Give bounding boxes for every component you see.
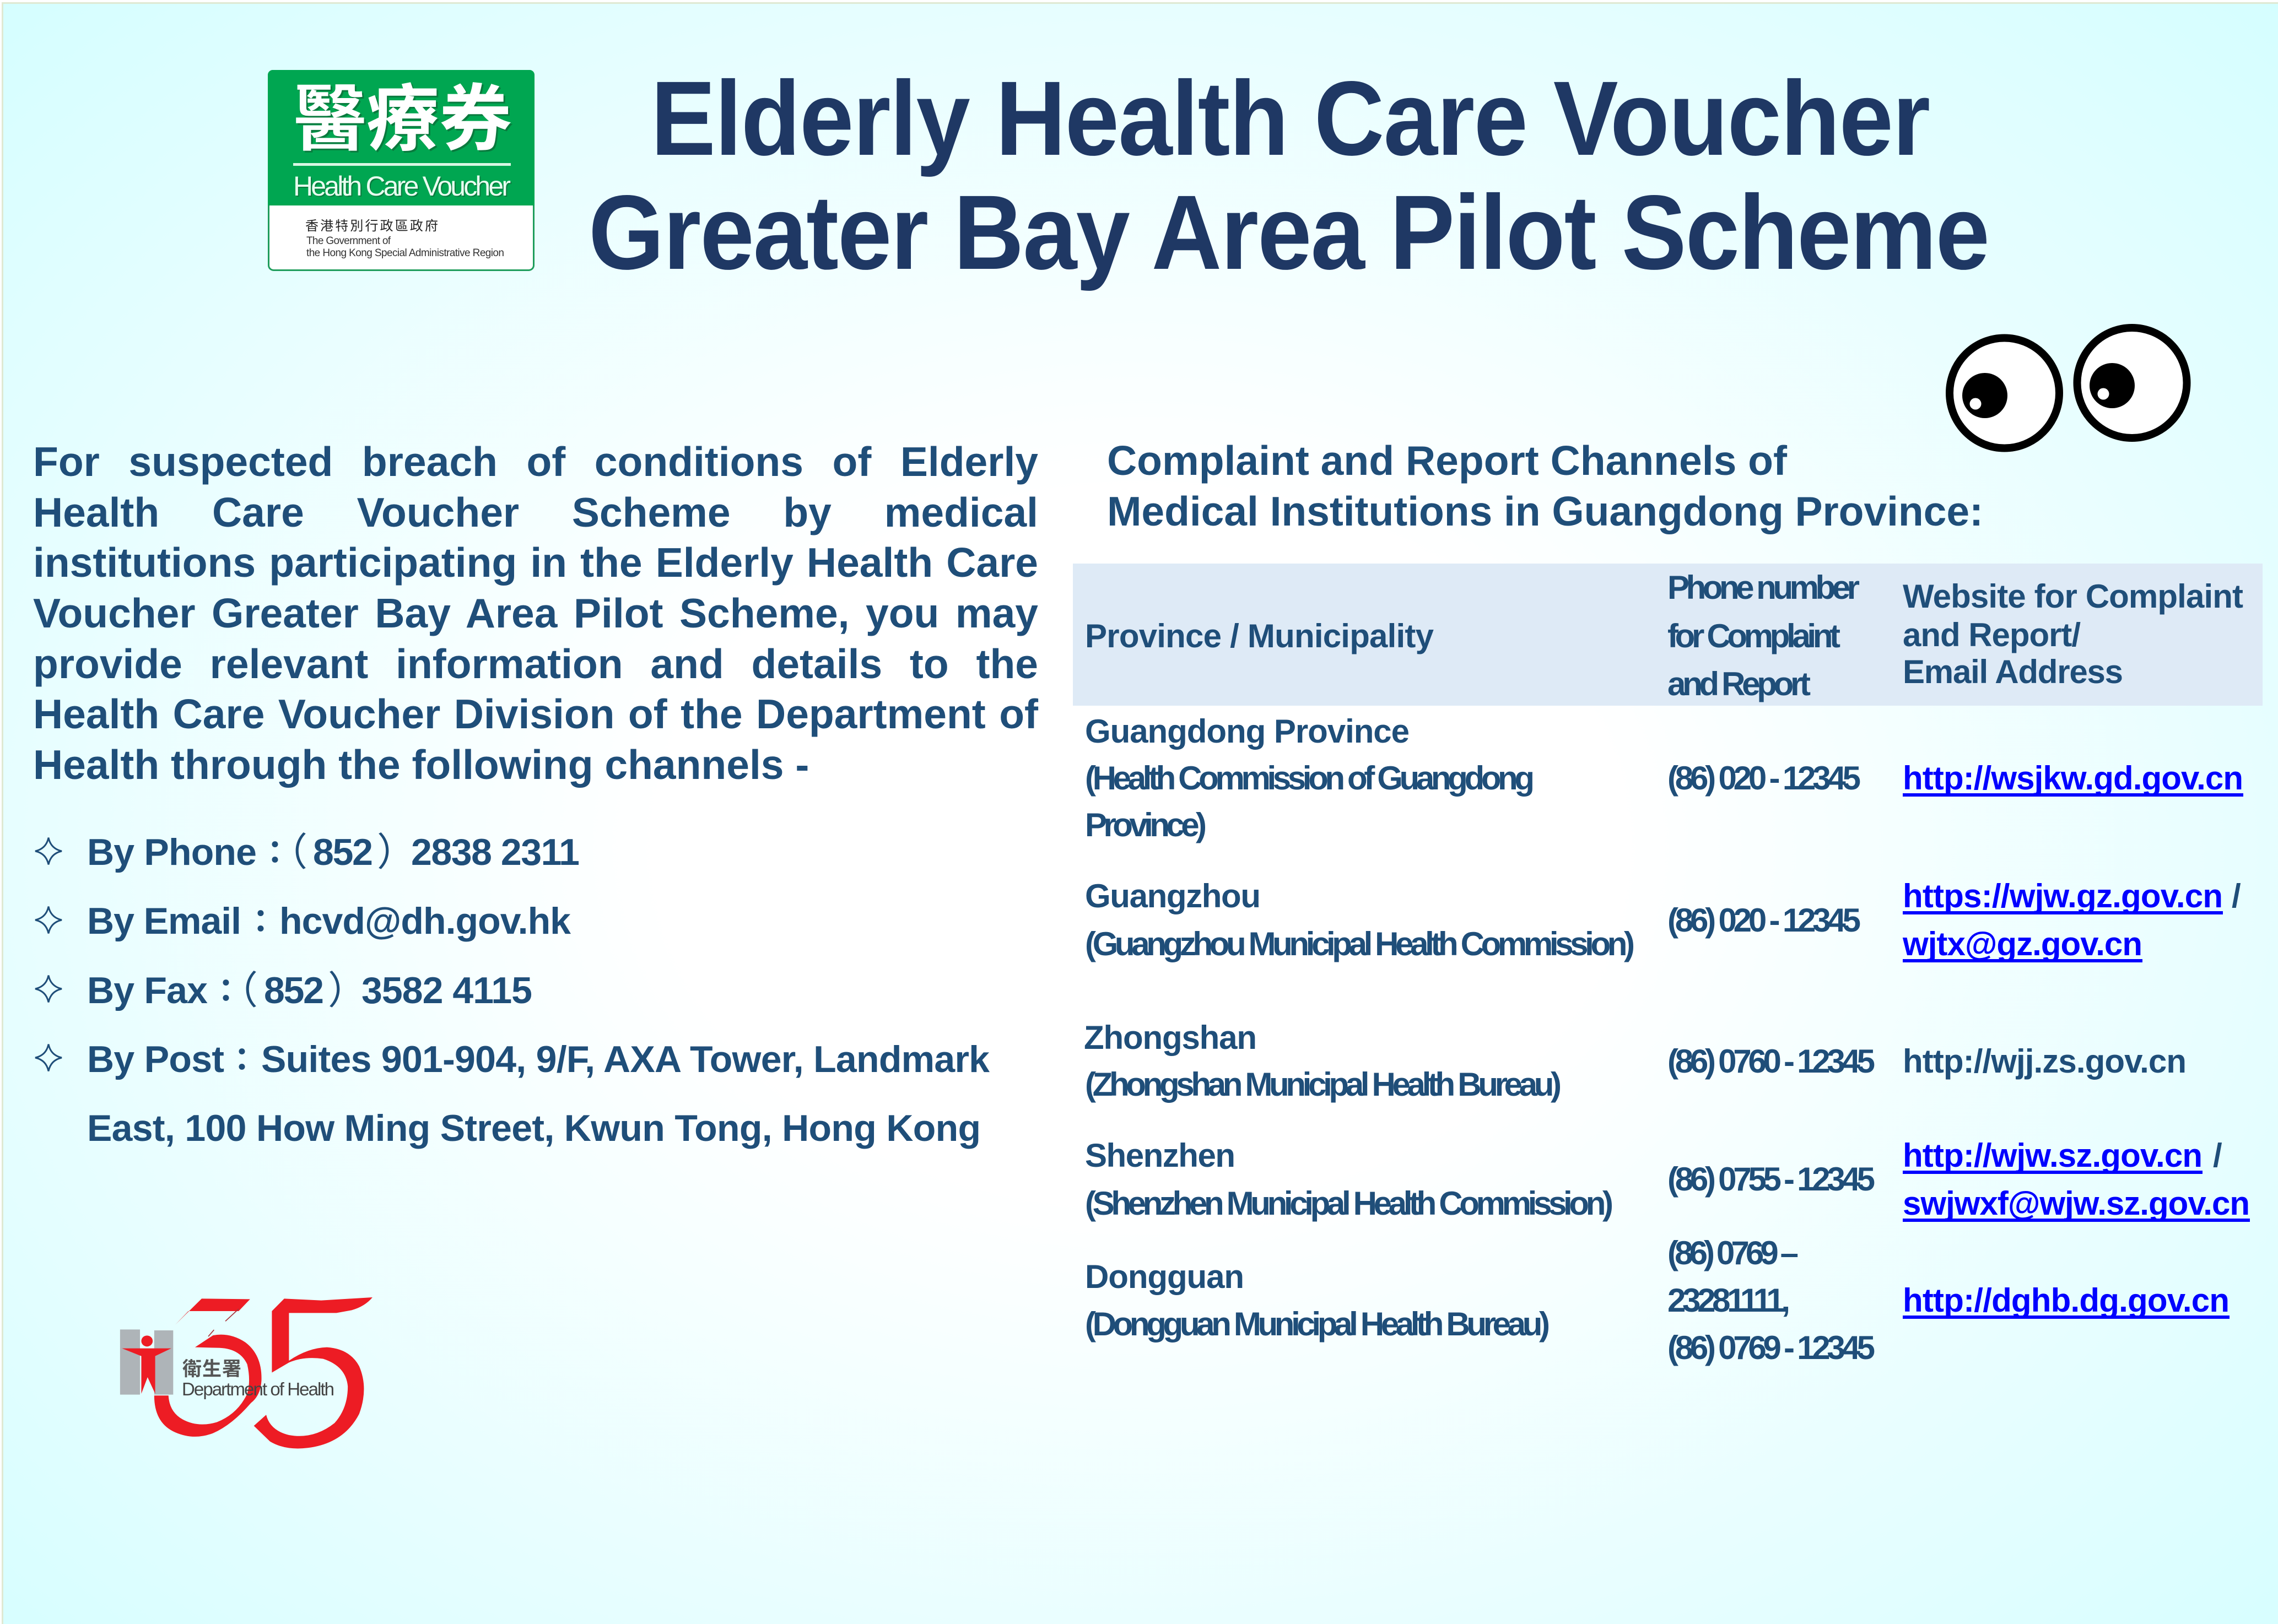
- bullet: by email: [35, 900, 571, 942]
- logo: Health Care Voucher: Health Care Voucher: [293, 171, 511, 202]
- bullet: by post: ：: [226, 1042, 258, 1078]
- bullet: by email: ：: [245, 904, 277, 940]
- bullet: by fax: ）: [328, 969, 366, 1012]
- table header: for Complaint: [1667, 618, 1840, 654]
- logo: Health Care Voucher: the Hong Kong Special Administrative Region: [306, 247, 504, 259]
- row: Shenzhen: swjwxf@wjw.sz.gov.cn: [1903, 1185, 2250, 1222]
- row: Dongguan: 23281111,: [1667, 1282, 1790, 1319]
- bullet: by fax: 3582 4115: [361, 970, 532, 1011]
- row: Shenzhen: (Shenzhen Municipal Health Commission): [1085, 1185, 1613, 1222]
- row: Zhongshan: Zhongshan: [1084, 1019, 1257, 1056]
- logo: Health Care Voucher: The Government of: [306, 235, 391, 247]
- intro paragraph: Voucher Greater Bay Area Pilot Scheme, you may: [33, 590, 1038, 636]
- table header: Phone number: [1667, 569, 1860, 606]
- row: Shenzhen: /: [2213, 1137, 2222, 1174]
- row: Shenzhen: http://wjw.sz.gov.cn: [1903, 1137, 2203, 1174]
- bullet: by phone: 852: [313, 831, 373, 873]
- table header: Website for Complaint: [1903, 578, 2243, 615]
- row: Zhongshan: (86) 0760 - 12345: [1667, 1043, 1875, 1080]
- contact channels list: [35, 831, 990, 1149]
- bullet: by fax: （: [219, 969, 258, 1012]
- row: Zhongshan: http://wjj.zs.gov.cn: [1903, 1043, 2187, 1080]
- row: Guangzhou: Guangzhou: [1085, 878, 1261, 914]
- intro paragraph: Health Care Voucher Division of the Department of: [33, 691, 1038, 737]
- bullet: by fax: ：: [210, 973, 242, 1009]
- bullet: by email: By Email: [87, 900, 241, 942]
- title: Greater Bay Area Pilot Scheme: [589, 174, 1990, 292]
- row: Shenzhen: Shenzhen: [1085, 1137, 1235, 1174]
- intro paragraph: Health through the following channels -: [33, 741, 809, 788]
- row: Zhongshan: [1084, 1019, 2187, 1103]
- bullet: by fax: By Fax: [87, 970, 208, 1011]
- row: Guangzhou: wjtx@gz.gov.cn: [1902, 925, 2142, 962]
- row: Guangzhou: /: [2232, 878, 2241, 914]
- logo: Health Care Voucher: Health Care Voucher: [294, 172, 512, 203]
- icon: cartoon eyes: [1950, 328, 2187, 448]
- row: Guangdong Province: (86) 020 - 12345: [1667, 760, 1861, 797]
- row: Shenzhen: (86) 0755 - 12345: [1667, 1161, 1875, 1198]
- row: Dongguan: (86) 0769 - 12345: [1667, 1329, 1875, 1366]
- bullet: by post: East, 100 How Ming Street, Kwun Tong, Hong Kong: [87, 1107, 981, 1149]
- title: Elderly Health Care Voucher: [651, 59, 1930, 178]
- row: Zhongshan: (Zhongshan Municipal Health Bureau): [1085, 1066, 1562, 1103]
- row: Guangdong Province: Guangdong Province: [1085, 713, 1410, 750]
- bullet: by phone: ：: [259, 835, 291, 871]
- table header: Email Address: [1903, 653, 2123, 690]
- bullet: by post: By Post: [87, 1038, 224, 1080]
- logo: Department of Health 35th anniversary: Department of Health: [182, 1379, 334, 1399]
- bullet: by fax: 852: [264, 970, 324, 1011]
- heading: complaint and report channels: [1107, 437, 1983, 534]
- bullet: by phone: （: [269, 831, 307, 874]
- intro paragraph: institutions participating in the Elderly Health Care: [33, 539, 1038, 586]
- heading: complaint and report channels: Complaint and Report Channels of: [1107, 437, 1788, 484]
- row: Dongguan: http://dghb.dg.gov.cn: [1903, 1282, 2230, 1319]
- row: Guangdong Province: (Health Commission of Guangdong: [1085, 760, 1535, 797]
- bullet: by phone: 2838 2311: [411, 831, 580, 873]
- logo: Health Care Voucher: [268, 70, 535, 270]
- bullet: by post: Suites 901-904, 9/F, AXA Tower, Landmark: [261, 1038, 990, 1080]
- logo: Health Care Voucher: 醫療券: [294, 79, 512, 160]
- heading: complaint and report channels: Medical Institutions in Guangdong Province:: [1107, 488, 1983, 534]
- bullet: by phone: By Phone: [87, 831, 257, 873]
- row: Guangzhou: [1085, 878, 2241, 962]
- bullet: by email: hcvd@dh.gov.hk: [279, 900, 571, 942]
- table header: and Report: [1667, 665, 1811, 702]
- row: Guangzhou: (Guangzhou Municipal Health Commission): [1085, 925, 1635, 962]
- row: Dongguan: (Dongguan Municipal Health Bureau): [1085, 1306, 1550, 1342]
- row: Shenzhen: [1085, 1137, 2250, 1222]
- intro paragraph: For suspected breach of conditions of Elderly: [33, 439, 1038, 485]
- intro paragraph: [33, 439, 1038, 788]
- row: Dongguan: (86) 0769 –: [1667, 1235, 1799, 1271]
- intro paragraph: Health Care Voucher Scheme by medical: [33, 489, 1038, 535]
- table header: Province / Municipality: [1085, 618, 1434, 654]
- logo: Department of Health 35th anniversary: 衛生署: [182, 1358, 241, 1380]
- row: Guangdong Province: [1085, 713, 2243, 843]
- row: Dongguan: [1085, 1235, 2230, 1366]
- table header: [1073, 564, 2263, 706]
- bullet: by post: [35, 1038, 990, 1149]
- bullet: by phone: ）: [377, 831, 415, 874]
- row: Guangzhou: https://wjw.gz.gov.cn: [1903, 878, 2223, 914]
- intro paragraph: provide relevant information and details to the: [33, 641, 1038, 687]
- logo: Health Care Voucher: 醫療券: [295, 80, 514, 161]
- row: Guangdong Province: http://wsjkw.gd.gov.cn: [1903, 760, 2243, 797]
- bullet: by fax: [35, 969, 532, 1012]
- row: Guangdong Province: Province): [1085, 806, 1207, 843]
- logo: Health Care Voucher: 香港特別行政區政府: [305, 219, 438, 234]
- bullet: by phone: [35, 831, 580, 874]
- logo: Department of Health 35th anniversary: [120, 1297, 373, 1448]
- title: [589, 59, 1990, 292]
- table header: and Report/: [1903, 616, 2081, 653]
- table: complaint channels: [1073, 564, 2263, 1366]
- row: Guangzhou: (86) 020 - 12345: [1667, 902, 1861, 939]
- row: Dongguan: Dongguan: [1085, 1258, 1244, 1295]
